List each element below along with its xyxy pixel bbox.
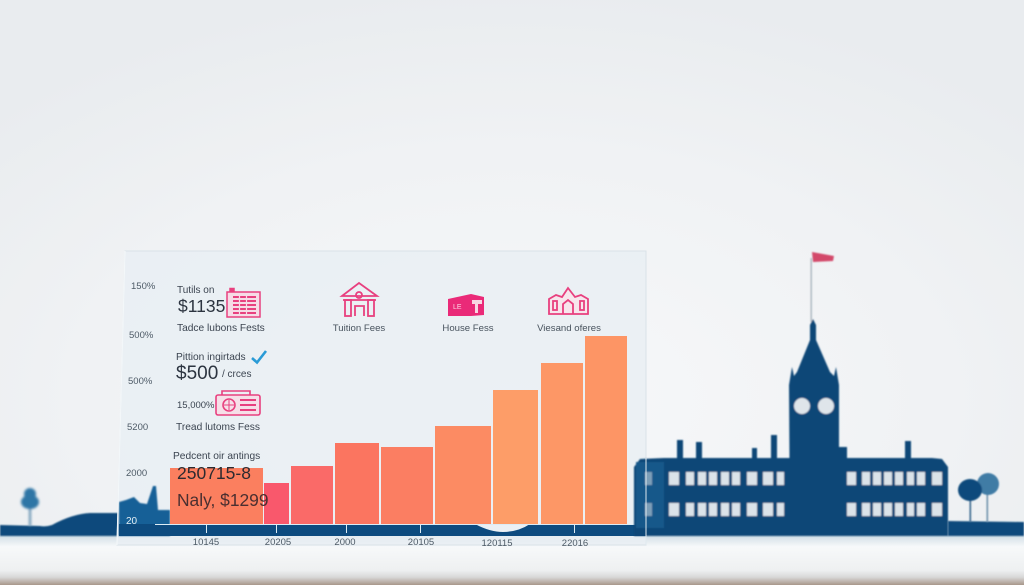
- windows: [645, 472, 942, 516]
- text block: pittion stat: $500: [176, 363, 218, 384]
- clock tower: [789, 319, 839, 536]
- x axis labels: 2000: [334, 537, 356, 548]
- y axis labels: 5200: [127, 422, 148, 433]
- y axis labels: 2000: [126, 468, 147, 479]
- text block: percent of earnings stat: Pedcent oir antings: [173, 451, 260, 462]
- panel: glass chart card: [117, 251, 646, 549]
- x axis labels: 10145: [193, 537, 219, 548]
- icon: blue check mark: [252, 351, 266, 362]
- text block: tuition stat: Tutils on: [177, 285, 214, 296]
- text block: pittion stat: [176, 352, 251, 384]
- text block: tuition stat: [177, 285, 265, 334]
- ground silhouette with hills: [0, 513, 1024, 536]
- university building silhouette: [634, 252, 948, 536]
- text block: percent of earnings stat: 250715-8: [177, 463, 251, 483]
- y axis labels: 500%: [129, 330, 154, 341]
- x axis line and ticks: [155, 524, 637, 533]
- icon: tree left: [21, 488, 39, 526]
- text block: tuition stat: $1135: [178, 296, 225, 316]
- text block: pittion stat: / crces: [222, 369, 251, 380]
- y axis labels: 150%: [131, 281, 156, 292]
- table surface: [0, 536, 1024, 585]
- x axis labels: 120115: [482, 538, 512, 549]
- y axis labels: 20: [126, 516, 138, 527]
- flag and pole: [810, 252, 834, 322]
- text block: pittion stat: Pittion ingirtads: [176, 352, 246, 363]
- icon: pink house fee card: LE: [453, 304, 462, 311]
- x axis labels: 22016: [562, 538, 588, 549]
- icon: pink university building: [342, 283, 377, 316]
- icon: pink house fee card: [448, 294, 484, 316]
- icon: pink calendar table: [227, 288, 260, 317]
- x axis labels: [193, 537, 588, 549]
- x axis labels: 20105: [408, 537, 434, 548]
- ground band behind glass: [119, 524, 646, 536]
- text block: percent of earnings stat: Naly, $1299: [177, 490, 269, 510]
- label: tuition fees: Tuition Fees: [333, 323, 385, 334]
- label: visiting offers: Viesand oferes: [537, 323, 601, 334]
- panel light edges: [117, 251, 125, 545]
- y axis labels: 500%: [128, 376, 153, 387]
- icon: pink ticket register: [216, 391, 260, 415]
- text block: fees stat: 15,000%: [177, 400, 215, 411]
- text block: fees stat: Tread lutoms Fess: [176, 422, 260, 433]
- main hall with chimneys: [634, 435, 948, 536]
- text block: fees stat: [176, 400, 260, 433]
- bar chart: [170, 336, 627, 524]
- label: house fees: House Fess: [442, 323, 494, 334]
- skyline behind glass: [119, 486, 170, 536]
- text block: tuition stat: Tadce lubons Fests: [177, 323, 265, 334]
- icon: trees right: [958, 473, 999, 522]
- y axis labels: [126, 281, 156, 527]
- x axis labels: 20205: [265, 537, 291, 548]
- icon: pink campus houses: [549, 288, 588, 314]
- text block: percent of earnings stat: [173, 451, 269, 510]
